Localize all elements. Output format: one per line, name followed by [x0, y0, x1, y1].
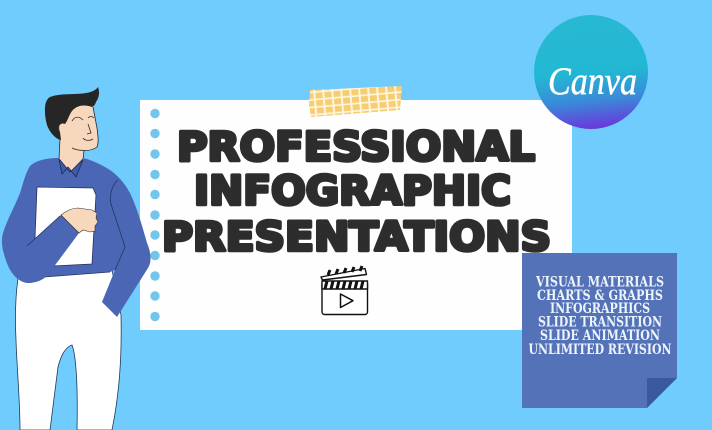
hand: [61, 208, 98, 233]
icon: washi tape: [309, 86, 402, 117]
document: [35, 187, 96, 266]
icon: Canva logo: Canva: [548, 60, 637, 103]
note text: CHARTS & GRAPHS: [537, 288, 663, 304]
note text: SLIDE ANIMATION: [540, 328, 660, 344]
face details: [72, 116, 94, 140]
title: PRESENTATIONS: [162, 214, 551, 260]
sticky note: [522, 253, 677, 408]
title: INFOGRAPHIC: [194, 168, 511, 214]
sweater: [2, 158, 151, 317]
note text: VISUAL MATERIALS: [535, 274, 664, 290]
neck and head skin: [59, 105, 98, 172]
note text: SLIDE TRANSITION: [538, 314, 662, 330]
hair: [45, 87, 99, 140]
person: [2, 87, 151, 430]
icon: Canva logo: [534, 15, 648, 129]
title: [162, 124, 551, 260]
note fold: [647, 378, 677, 408]
trousers: [15, 270, 121, 430]
note text: INFOGRAPHICS: [550, 301, 650, 317]
title: PROFESSIONAL: [177, 124, 535, 170]
forearm: [3, 215, 79, 283]
icon: clapperboard: [321, 266, 368, 314]
note text: UNLIMITED REVISION: [528, 342, 672, 358]
binder holes: [150, 109, 160, 321]
panel: notebook page: [140, 100, 572, 330]
note text: [528, 274, 672, 358]
collar: [59, 159, 83, 177]
